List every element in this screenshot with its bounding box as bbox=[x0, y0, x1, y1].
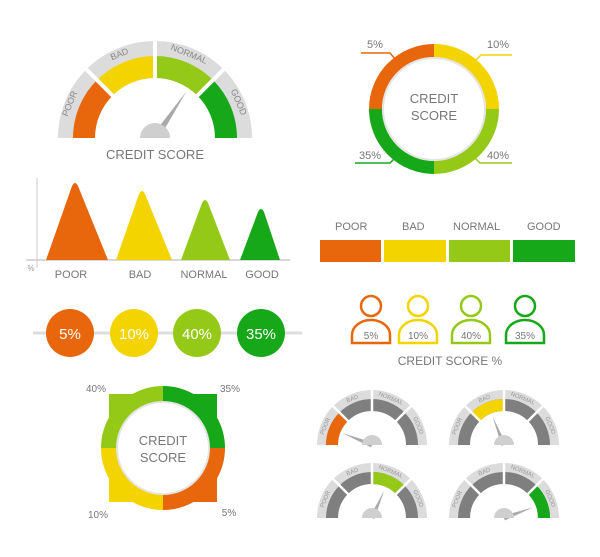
horizontal bar strip: BAD bbox=[402, 221, 425, 233]
small gauge: normal: POOR bbox=[320, 490, 332, 509]
small gauge: normal bbox=[320, 461, 424, 551]
small gauge: good bbox=[452, 461, 556, 551]
donut chart: SCORE bbox=[411, 108, 457, 123]
percentage circles row: 5% bbox=[59, 326, 81, 343]
small gauge: normal: BAD bbox=[346, 467, 360, 478]
small gauge: poor: BAD bbox=[346, 394, 360, 405]
small gauge: bad: GOOD bbox=[543, 416, 556, 436]
big gauge: CREDIT SCORE bbox=[106, 147, 204, 162]
big gauge: BAD bbox=[109, 46, 130, 62]
big gauge: NORMAL bbox=[169, 42, 209, 66]
small gauge: normal: NORMAL bbox=[378, 465, 404, 480]
flower credit score chart: 35% bbox=[220, 384, 240, 395]
donut chart: 35% bbox=[359, 150, 381, 162]
horizontal bar strip bbox=[320, 221, 575, 262]
flower credit score chart: 5% bbox=[222, 508, 236, 519]
flower credit score chart bbox=[86, 384, 240, 521]
small gauge: poor: POOR bbox=[320, 417, 332, 436]
small gauge: bad: BAD bbox=[478, 394, 492, 405]
percentage circles row: 35% bbox=[246, 326, 276, 343]
horizontal bar strip: NORMAL bbox=[453, 221, 500, 233]
triangle bar chart: POOR bbox=[55, 269, 87, 281]
triangle bar chart bbox=[26, 178, 290, 281]
triangle bar chart: GOOD bbox=[245, 269, 279, 281]
flower credit score chart: CREDIT bbox=[139, 433, 187, 448]
flower credit score chart: SCORE bbox=[140, 450, 186, 465]
flower credit score chart: 10% bbox=[88, 510, 108, 521]
big gauge: GOOD bbox=[229, 87, 249, 117]
person icons: 40% bbox=[461, 331, 481, 342]
small gauge: good: GOOD bbox=[543, 489, 556, 509]
donut chart: 10% bbox=[487, 39, 509, 51]
small gauge: good: NORMAL bbox=[510, 465, 536, 480]
triangle bar chart: % bbox=[27, 264, 35, 273]
donut chart: 5% bbox=[367, 39, 383, 51]
small gauge: bad bbox=[452, 388, 556, 478]
small gauge: poor: GOOD bbox=[411, 416, 424, 436]
percentage circles row: 40% bbox=[182, 326, 212, 343]
flower credit score chart: 40% bbox=[86, 384, 106, 395]
person icons: 35% bbox=[515, 331, 535, 342]
percentage circles row bbox=[33, 309, 302, 357]
donut chart: CREDIT bbox=[410, 91, 458, 106]
big gauge: POOR bbox=[60, 89, 79, 118]
big gauge bbox=[60, 38, 249, 197]
person icons: 10% bbox=[408, 331, 428, 342]
donut chart bbox=[355, 39, 512, 168]
person icons: CREDIT SCORE % bbox=[398, 354, 503, 368]
horizontal bar strip: POOR bbox=[335, 221, 367, 233]
donut chart: 40% bbox=[487, 150, 509, 162]
small gauge: poor bbox=[320, 388, 424, 478]
triangle bar chart: BAD bbox=[129, 269, 151, 281]
percentage circles row: 10% bbox=[119, 326, 149, 343]
horizontal bar strip: GOOD bbox=[527, 221, 561, 233]
small gauge: normal: GOOD bbox=[411, 489, 424, 509]
person icons: 5% bbox=[364, 331, 378, 342]
person icons bbox=[352, 296, 544, 368]
small gauge: bad: POOR bbox=[452, 417, 464, 436]
small gauge: poor: NORMAL bbox=[378, 392, 404, 407]
small gauge: bad: NORMAL bbox=[510, 392, 536, 407]
small gauge: good: POOR bbox=[452, 490, 464, 509]
small gauge: good: BAD bbox=[478, 467, 492, 478]
triangle bar chart: NORMAL bbox=[180, 269, 228, 281]
